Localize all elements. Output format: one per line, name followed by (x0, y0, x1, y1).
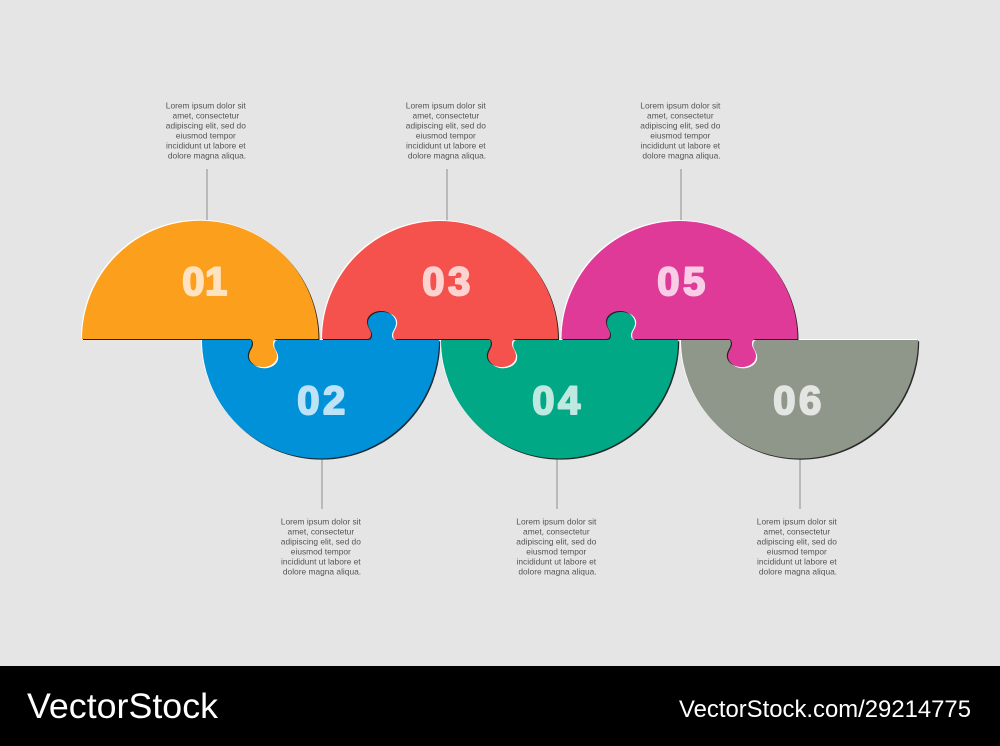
connector line 06 (799, 459, 801, 509)
connector line 03 (446, 169, 448, 221)
text block 02: incididunt ut labore et (281, 556, 361, 566)
text block 01: amet, consectetur (173, 110, 239, 120)
text block 01: dolore magna aliqua. (168, 150, 246, 160)
text block 01: Lorem ipsum dolor sit (166, 100, 247, 110)
connector line 05 (680, 169, 682, 221)
connector line 02 (321, 459, 323, 509)
number 04: 04 (532, 379, 584, 423)
number 06: 06 (773, 379, 825, 423)
footer url text: VectorStock.com/29214775 (679, 696, 971, 723)
text block 02: Lorem ipsum dolor sit (281, 516, 362, 526)
text block 03: adipiscing elit, sed do (406, 120, 486, 130)
text block 03: eiusmod tempor (416, 130, 476, 140)
text block 01: eiusmod tempor (176, 130, 236, 140)
text block 03: amet, consectetur (413, 110, 479, 120)
text block 04: eiusmod tempor (526, 546, 587, 556)
connector line 01 (206, 169, 208, 221)
puzzle tab 02 (367, 311, 397, 343)
text block 05: dolore magna aliqua. (642, 150, 721, 160)
text block 01: adipiscing elit, sed do (166, 120, 246, 130)
text block 02: eiusmod tempor (291, 546, 351, 556)
text block 04: dolore magna aliqua. (518, 566, 597, 576)
text block 04: incididunt ut labore et (517, 556, 597, 566)
text block 04: adipiscing elit, sed do (516, 536, 597, 546)
text block 05: adipiscing elit, sed do (640, 120, 721, 130)
text block 03: dolore magna aliqua. (408, 150, 486, 160)
number 02: 02 (297, 379, 349, 423)
text block 01: incididunt ut labore et (166, 140, 246, 150)
text block 04: Lorem ipsum dolor sit (516, 516, 597, 526)
panel: segment 06 (680, 339, 919, 460)
text block 03: Lorem ipsum dolor sit (406, 100, 487, 110)
text block 03: incididunt ut labore et (406, 140, 486, 150)
panel: segment 05 (560, 220, 798, 340)
puzzle tab 03 (487, 336, 517, 368)
puzzle tab 04 (606, 311, 636, 343)
text block 04: amet, consectetur (523, 526, 590, 536)
text block 02: adipiscing elit, sed do (281, 536, 361, 546)
text block 06: incididunt ut labore et (757, 556, 837, 566)
text block 02: amet, consectetur (288, 526, 354, 536)
text block 06: Lorem ipsum dolor sit (757, 516, 838, 526)
number 03: 03 (422, 260, 474, 304)
text block 02: dolore magna aliqua. (283, 566, 361, 576)
footer logo text: VectorStock (27, 687, 219, 726)
footer bar (0, 666, 1000, 746)
text block 05: Lorem ipsum dolor sit (640, 100, 721, 110)
text block 05: incididunt ut labore et (641, 140, 721, 150)
number 01: 01 (182, 260, 228, 304)
panel: segment 04 (440, 339, 679, 460)
number 05: 05 (657, 260, 709, 304)
connector line 04 (556, 459, 558, 509)
text block 06: eiusmod tempor (767, 546, 827, 556)
text block 06: adipiscing elit, sed do (757, 536, 837, 546)
text block 05: amet, consectetur (647, 110, 714, 120)
panel: segment 03 (321, 220, 559, 340)
puzzle tab 01 (248, 336, 278, 368)
text block 06: amet, consectetur (764, 526, 830, 536)
panel: segment 01 (81, 220, 320, 340)
text block 06: dolore magna aliqua. (759, 566, 837, 576)
text block 05: eiusmod tempor (650, 130, 711, 140)
panel: segment 02 (201, 339, 440, 460)
puzzle tab 05 (727, 336, 757, 368)
